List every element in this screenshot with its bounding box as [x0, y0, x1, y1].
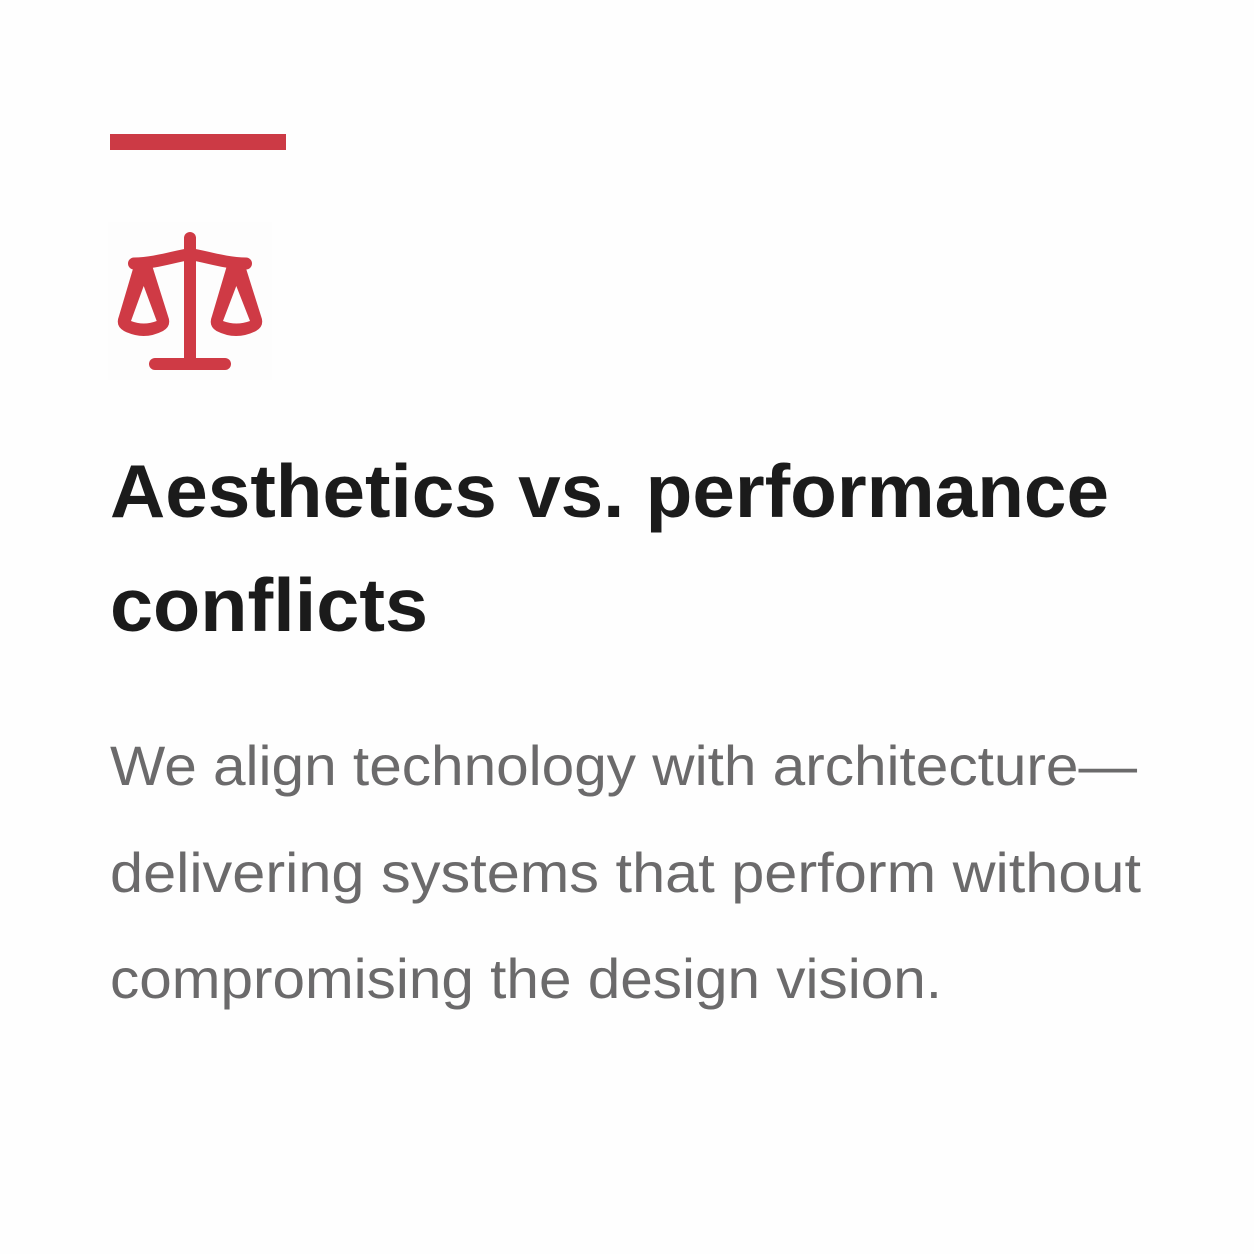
body text: compromising the design vision.: [110, 947, 942, 1010]
red accent bar: [110, 134, 286, 150]
icon: balance scales: [108, 222, 272, 380]
body text: delivering systems that perform without: [110, 841, 1141, 904]
heading: conflicts: [110, 563, 428, 647]
heading: [110, 449, 1109, 647]
heading: Aesthetics vs. performance: [110, 449, 1109, 533]
body text: [110, 734, 1141, 1010]
body text: We align technology with architecture—: [110, 734, 1137, 797]
